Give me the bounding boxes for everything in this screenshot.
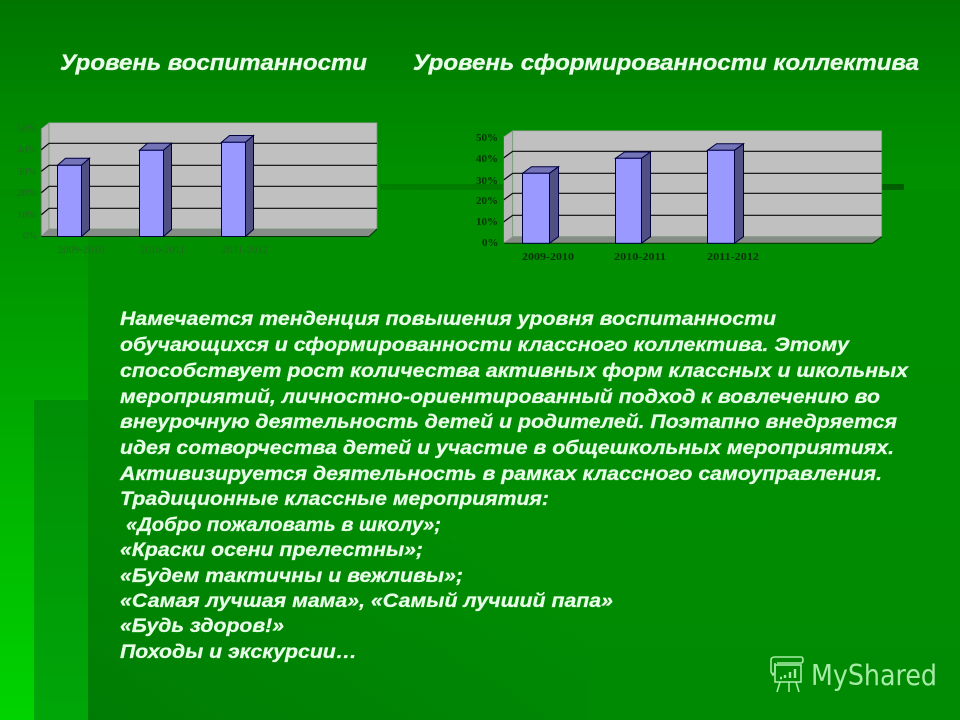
text block: conclusions: способствует рост количества активных форм классных и школьных [120,361,910,382]
axis labels: left chart: 0% [23,231,37,242]
text block: conclusions: Активизируется деятельность в рамках классного самоуправления. [119,464,882,485]
text block: conclusions: Походы и экскурсии… [120,642,357,663]
logo: MyShared [771,657,937,692]
bar: 2011-2012 [708,144,744,243]
bar: 2010-2011 [140,143,172,236]
axis labels: left chart: 20% [17,188,36,199]
axis labels: right chart: 10% [476,216,498,228]
text block: conclusions: мероприятий, личностно-ориентированный подход к вовлечению во [120,387,880,408]
bar: 2011-2012 [222,136,254,236]
axis labels: right chart: 2010-2011 [614,251,666,263]
bar: 2009-2010 [522,167,558,243]
chart: right [476,131,882,263]
wordmark: MyShared [811,659,937,692]
bar: 2010-2011 [616,152,650,243]
text block: conclusions: «Краски осени прелестны»; [120,540,423,561]
axis labels: right chart: 0% [482,237,498,249]
text block: conclusions: идея сотворчества детей и участие в общешкольных мероприятиях. [120,438,894,459]
icon: presentation board [771,657,803,692]
axis labels: left chart: 2010-2011 [140,245,185,256]
axis labels: right chart [476,132,760,263]
text block: conclusions: «Будь здоров!» [120,616,284,637]
axis labels: left chart: 2011-2012 [222,245,268,256]
axis labels: left chart: 40% [17,145,36,156]
axis labels: left chart: 50% [17,124,36,135]
text block: conclusions [119,309,910,663]
axis labels: right chart: 2011-2012 [707,251,760,263]
axis labels: right chart: 2009-2010 [522,251,575,263]
text block: conclusions: Традиционные классные мероприятия: [120,489,549,510]
axis labels: left chart: 2009-2010 [58,245,104,256]
heading: left: Уровень воспитанности [60,50,367,75]
text block: conclusions: «Будем тактичны и вежливы»; [120,566,463,587]
text block: conclusions: «Добро пожаловать в школу»; [126,515,441,536]
text block: conclusions: внеурочную деятельность детей и родителей. Поэтапно внедряется [120,412,897,433]
axis labels: left chart: 30% [17,167,36,178]
bar: 2009-2010 [58,158,90,236]
text block: conclusions: обучающихся и сформированности классного коллектива. Этому [120,335,851,356]
chart: left [17,123,377,256]
text block: conclusions: «Самая лучшая мама», «Самый лучший папа» [120,591,613,612]
axis labels: right chart: 20% [476,195,498,207]
axis labels: left chart [17,124,268,256]
text block: conclusions: Намечается тенденция повышения уровня воспитанности [120,309,776,330]
axis labels: right chart: 40% [476,153,498,165]
axis labels: left chart: 10% [17,210,36,221]
heading: right: Уровень сформированности коллектива [413,50,919,75]
axis labels: right chart: 30% [476,175,498,187]
axis labels: right chart: 50% [476,132,498,144]
